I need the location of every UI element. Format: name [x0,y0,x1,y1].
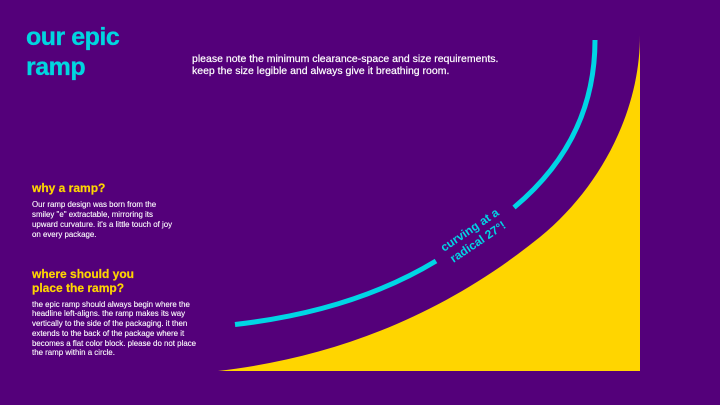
title [26,22,120,80]
text block: why a ramp: on every package. [32,230,96,239]
text block: why a ramp: upward curvature. it's a little touch of joy [32,220,172,229]
text block: where to place [32,300,196,357]
title: ramp [26,52,85,80]
text block: where to place: vertically to the side of the packaging. it then [32,319,187,328]
text block: where to place: becomes a flat color block. please do not place [32,339,196,348]
text block: where to place: headline left-aligns. the ramp makes its way [32,309,185,318]
text block: why a ramp: smiley "e" extractable, mirroring its [32,210,153,219]
heading: where to place [32,267,134,295]
heading: where to place: where should you [32,267,134,281]
intro text [192,53,498,77]
curved label: curving at a [438,205,502,254]
intro text: please note the minimum clearance-space and size requirements. [192,53,498,65]
yellow ramp block [218,35,640,371]
text block: why a ramp [32,200,172,239]
text block: where to place: extends to the back of the package where it [32,329,184,338]
text block: where to place: the ramp within a circle. [32,348,115,357]
curved label second line: radical 27°! [447,218,508,265]
cyan ramp line upper segment [514,40,595,208]
heading: where to place: place the ramp? [32,281,124,295]
intro text: keep the size legible and always give it breathing room. [192,65,449,77]
title: our epic [26,22,119,50]
heading: why a ramp: why a ramp? [32,181,105,195]
cyan ramp line lower segment [235,261,436,324]
text block: why a ramp: Our ramp design was born from the [32,200,156,209]
text block: where to place: the epic ramp should always begin where the [32,300,190,308]
